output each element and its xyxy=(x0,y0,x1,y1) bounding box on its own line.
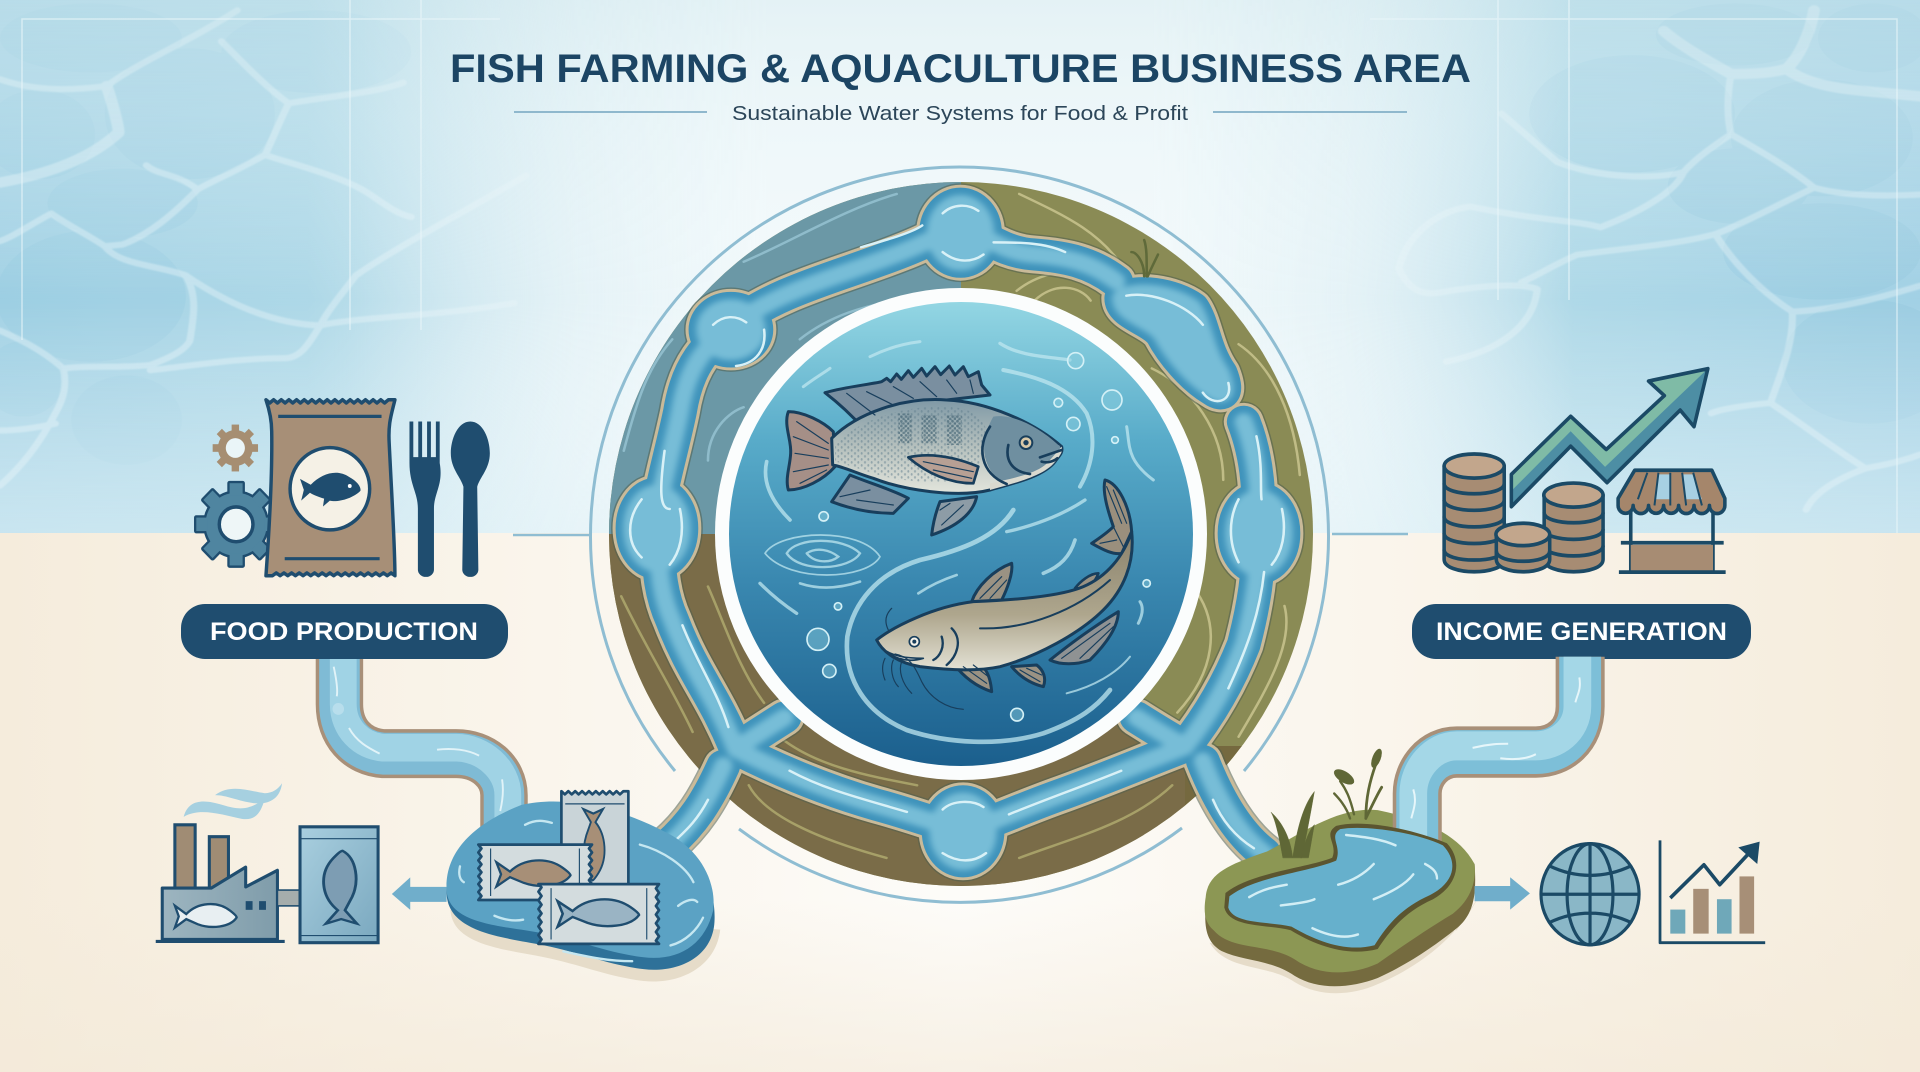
pill: food production xyxy=(181,604,508,659)
icon: feed bag xyxy=(266,400,395,576)
connector: left line to ring xyxy=(513,534,590,536)
land top xyxy=(1205,810,1475,972)
white rim xyxy=(715,288,1207,780)
icon: reeds xyxy=(1271,748,1384,858)
panel: income icons xyxy=(1444,369,1726,572)
packet: front horizontal xyxy=(538,884,659,944)
panel: pond ring with channels xyxy=(600,170,1330,900)
outer thin ring xyxy=(590,167,1329,902)
pond shadow xyxy=(450,910,720,982)
water xyxy=(729,302,1193,766)
icon: market stall xyxy=(1618,470,1726,572)
icon: coin stacks xyxy=(1444,454,1603,572)
panel: food production icons xyxy=(196,400,490,577)
pond shadow xyxy=(1210,897,1479,993)
fish: tilapia xyxy=(787,366,1062,535)
pond xyxy=(447,802,715,970)
panel: factory and package xyxy=(156,783,378,943)
channel highlights xyxy=(630,206,1284,860)
grass tuft xyxy=(1131,240,1158,276)
icon: factory xyxy=(156,825,300,941)
icon: blue gear xyxy=(196,483,276,565)
center pond disc xyxy=(715,288,1207,780)
pill: income generation: INCOME GENERATION xyxy=(1436,618,1727,646)
fish: catfish xyxy=(877,480,1132,709)
water swirls xyxy=(760,342,1153,742)
land base xyxy=(1205,856,1475,986)
pill: income generation xyxy=(1412,604,1751,659)
panel: wetland pond details xyxy=(1224,748,1765,952)
icon: growth arrow xyxy=(1511,369,1708,507)
bar chart with trend arrow xyxy=(1660,840,1765,943)
bubbles xyxy=(807,353,1150,721)
packet: back vertical xyxy=(561,791,628,886)
icon: brown gear xyxy=(213,425,258,471)
icon: spoon xyxy=(451,422,490,577)
panel: processing pond with packets xyxy=(392,791,720,982)
packet: left horizontal xyxy=(478,845,592,900)
pill: food production: FOOD PRODUCTION xyxy=(210,618,478,646)
channel: right water path xyxy=(1411,657,1580,847)
icon: arrow to factory xyxy=(392,877,447,910)
subtitle with side rules: Sustainable Water Systems for Food & Profit xyxy=(732,103,1188,125)
icon: frozen fish package xyxy=(300,827,378,943)
channel: left water path xyxy=(333,657,508,831)
icon: arrow to market xyxy=(1475,877,1530,910)
pond water xyxy=(1224,824,1456,952)
land contour lines xyxy=(621,194,1300,858)
icon: smoke xyxy=(184,783,282,819)
icon: globe xyxy=(1541,844,1639,945)
connector: right line to ring xyxy=(1332,533,1408,535)
icon: fork xyxy=(409,422,441,577)
panel: wetland pond land xyxy=(1205,810,1479,993)
land ring xyxy=(600,170,1330,900)
title: FISH FARMING & AQUACULTURE BUSINESS AREA xyxy=(450,47,1471,91)
water channels xyxy=(630,204,1284,861)
